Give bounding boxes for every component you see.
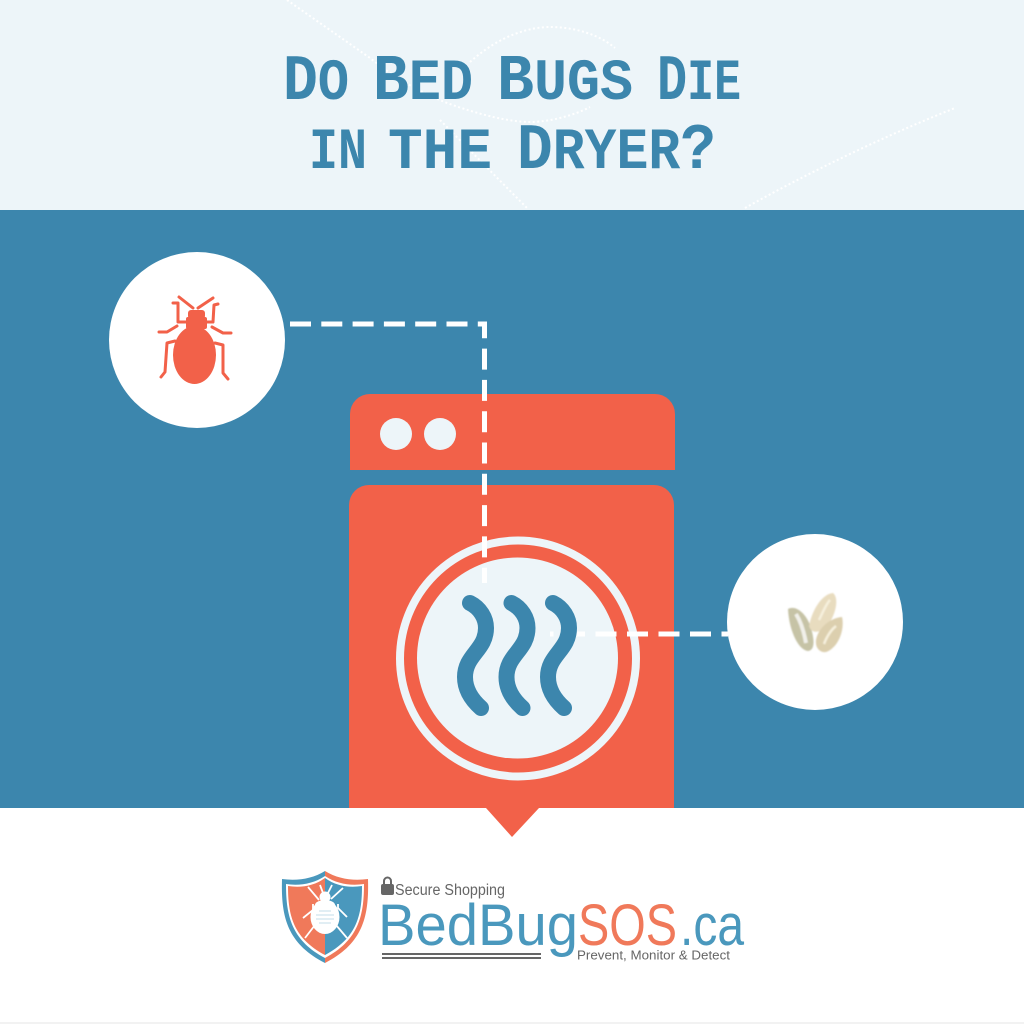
logo wordmark: .ca xyxy=(680,893,745,958)
connector: eggs to dryer xyxy=(550,632,728,636)
connector: bug to dryer xyxy=(290,324,484,583)
panel: blue main area xyxy=(0,210,1024,808)
panel: header band xyxy=(0,0,1024,210)
icon: heat waves xyxy=(465,603,569,708)
icon: padlock xyxy=(381,878,394,895)
title line 1 xyxy=(283,45,741,119)
logo wordmark: SOS xyxy=(578,893,677,958)
title line 2: DRYER? xyxy=(517,114,716,188)
title line 1: DO xyxy=(283,45,349,119)
logo: BedBugSOS.ca xyxy=(282,871,745,963)
circle: bed bug xyxy=(109,252,285,428)
logo double rule xyxy=(382,953,541,959)
logo tagline: prevent monitor detect: Prevent, Monitor & Detect xyxy=(577,948,730,962)
pointer below dryer xyxy=(486,808,539,837)
icon: bed bug xyxy=(159,297,231,384)
title line 2: THE xyxy=(388,121,492,186)
title line 2 xyxy=(309,114,716,188)
title line 1: BED xyxy=(373,45,473,119)
panel: white footer xyxy=(0,808,1024,1024)
dryer illustration xyxy=(349,394,675,837)
circle: bed bug eggs xyxy=(727,534,903,710)
icon: bed bug eggs xyxy=(788,593,843,652)
title line 1: BUGS xyxy=(497,45,633,119)
title line 2: IN xyxy=(309,121,367,186)
dryer door xyxy=(400,540,636,776)
dryer body xyxy=(349,485,674,808)
dryer control panel xyxy=(350,394,675,470)
logo tagline: secure shopping: Secure Shopping xyxy=(395,882,505,899)
dryer buttons xyxy=(380,418,456,450)
title line 1: DIE xyxy=(657,45,741,119)
title xyxy=(283,45,741,188)
logo wordmark: BedBug xyxy=(378,893,578,958)
logo shield xyxy=(282,871,368,963)
logo wordmark xyxy=(378,893,745,958)
